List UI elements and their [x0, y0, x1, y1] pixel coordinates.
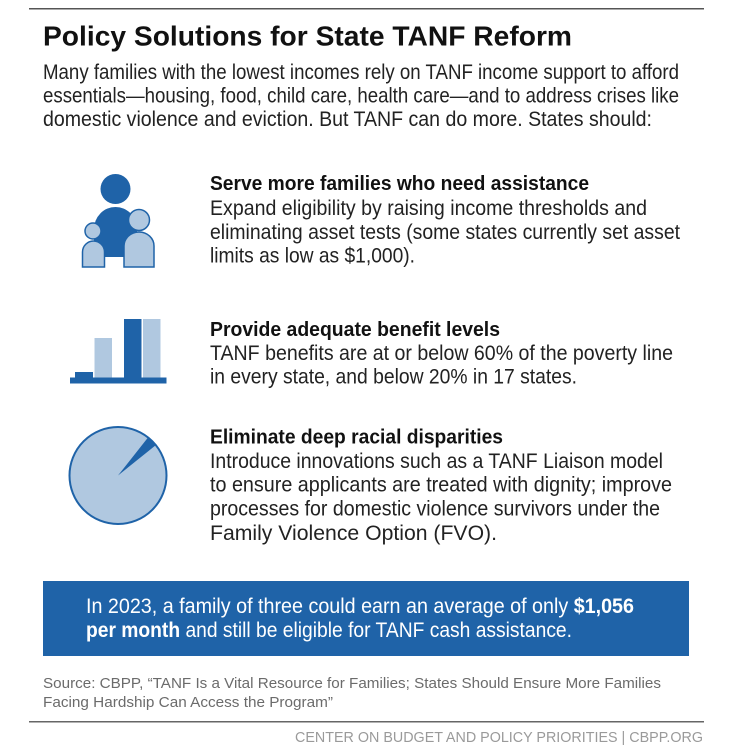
source note: Source: CBPP, “TANF Is a Vital Resource for Families; States Should Ensure More Families [43, 676, 661, 692]
solution 3 text: Family Violence Option (FVO). [210, 522, 497, 545]
footer credit: CENTER ON BUDGET AND POLICY PRIORITIES | CBPP.ORG [295, 729, 703, 746]
solution 1 text: Expand eligibility by raising income thresholds and [210, 197, 647, 220]
solution 3 text: Introduce innovations such as a TANF Liaison model [210, 450, 663, 473]
icon: pie chart [70, 427, 166, 524]
callout banner: per month and still be eligible for TANF cash assistance. [86, 619, 572, 642]
title: Policy Solutions for State TANF Reform [43, 20, 572, 52]
icon: family [82, 174, 154, 267]
solution 2 text: TANF benefits are at or below 60% of the poverty line [210, 342, 673, 365]
callout banner: In 2023, a family of three could earn an average of only $1,056 [86, 595, 634, 618]
solution 3 text: to ensure applicants are treated with dignity; improve [210, 474, 672, 496]
solution 3 text [210, 426, 672, 545]
solution 2 text: Provide adequate benefit levels [210, 318, 500, 341]
solution 1 text [210, 172, 680, 268]
solution 1 text: Serve more families who need assistance [210, 172, 589, 195]
icon: bar chart [70, 319, 166, 384]
intro paragraph: domestic violence and eviction. But TANF can do more. States should: [43, 108, 652, 131]
solution 1 text: limits as low as $1,000). [210, 244, 415, 268]
source note: Facing Hardship Can Access the Program” [43, 695, 333, 711]
solution 3 text: processes for domestic violence survivors under the [210, 498, 660, 520]
solution 2 text: in every state, and below 20% in 17 states. [210, 366, 577, 388]
source note [43, 676, 661, 711]
callout banner [43, 581, 689, 656]
solution 3 text: Eliminate deep racial disparities [210, 426, 503, 448]
intro paragraph [43, 61, 679, 131]
solution 2 text [210, 318, 673, 388]
solution 1 text: eliminating asset tests (some states currently set asset [210, 221, 680, 244]
